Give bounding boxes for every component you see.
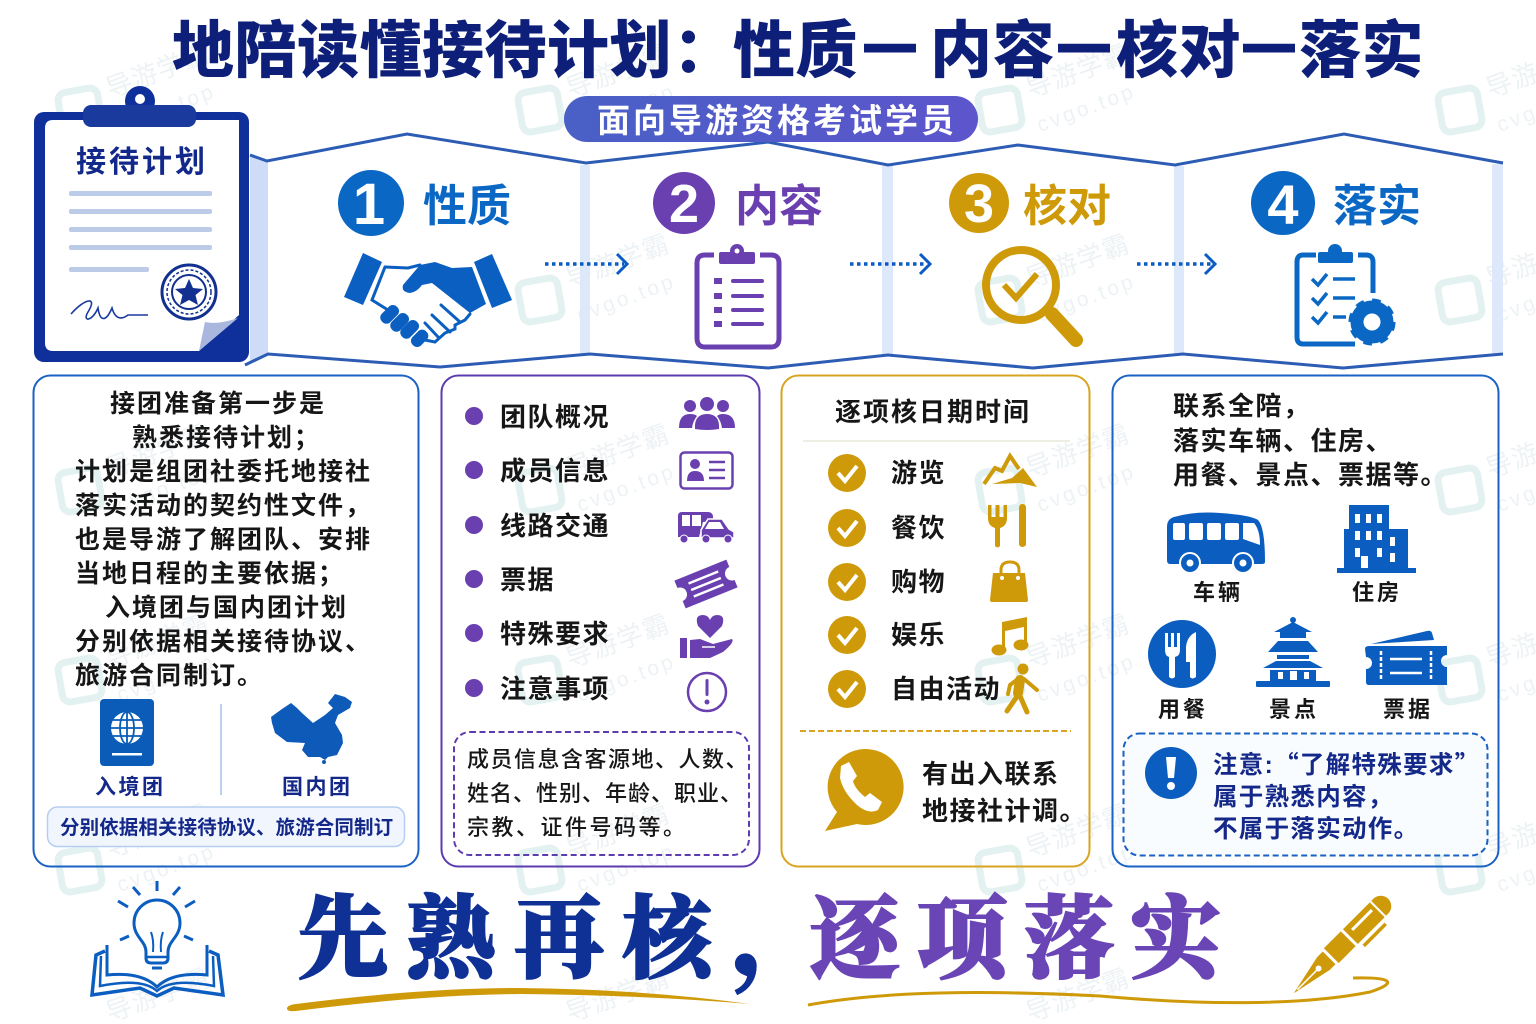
watermark layer: cvgo.top [1034, 80, 1139, 137]
check heading: 逐项核日期时间 [835, 397, 1031, 427]
icon: magnifier [986, 250, 1076, 340]
gold underline right [808, 978, 1388, 1005]
card title: 接待计划 [76, 146, 208, 179]
watermark layer: 导游学霸 [562, 229, 674, 294]
watermark layer: 导游学霸 [562, 609, 674, 674]
slogan: implement item by item: 逐项落实 [810, 891, 1238, 990]
content list [465, 402, 610, 704]
watermark layer: cvgo.top [574, 80, 679, 137]
liaison text [922, 759, 1087, 826]
step 2: content [653, 172, 823, 234]
subtitle pill: 面向导游资格考试学员 [597, 102, 957, 139]
icon: handshake [344, 253, 512, 349]
panel: content [442, 376, 760, 866]
nature body text: 计划是组团社委托地接社 [75, 458, 372, 486]
watermark layer: 导游学霸 [562, 39, 674, 104]
icon: heart in hand [680, 615, 733, 658]
icon: contract clipboard [34, 86, 249, 362]
panel: check [782, 376, 1090, 866]
title: 内容 [930, 17, 1055, 86]
nature body text [75, 390, 372, 690]
icon: checklist with gear [1297, 244, 1392, 344]
icon: notice circle [688, 673, 726, 711]
title: 落实 [1299, 17, 1424, 86]
icon: China map [271, 694, 352, 764]
liaison text: 有出入联系 [922, 759, 1060, 789]
nature body text: 接团准备第一步是 [110, 390, 326, 418]
gold underline left [287, 988, 750, 1011]
check list: 购物 [891, 567, 946, 597]
subtitle pill [564, 96, 978, 142]
label: ticket: 票据 [1383, 697, 1433, 722]
icon: pagoda [1256, 617, 1330, 687]
icon: building [1337, 505, 1416, 573]
nature body text: 当地日程的主要依据； [75, 560, 345, 588]
arrow 1 [545, 254, 627, 274]
icon: tickets [1365, 631, 1447, 685]
watermark layer: cvgo.top [574, 650, 679, 707]
content list: 成员信息 [500, 456, 610, 486]
watermark layer: cvgo.top [1034, 270, 1139, 327]
content list: 票据 [500, 565, 555, 595]
implement text: 用餐、景点、票据等。 [1173, 460, 1448, 490]
nature body text: 也是导游了解团队、安排 [75, 526, 372, 554]
watermark layer: 导游学霸 [562, 799, 674, 864]
content list: 团队概况 [500, 402, 610, 432]
attention note: 注意:“了解特殊要求” [1213, 746, 1480, 781]
watermark layer: cvgo.top [114, 460, 219, 517]
label: domestic group: 国内团 [282, 776, 352, 799]
icon: dining [1148, 620, 1216, 688]
icon: group [679, 397, 735, 430]
content list: 特殊要求 [500, 619, 610, 649]
watermark layer: 导游学霸 [1022, 419, 1134, 484]
watermark layer: cvgo.top [574, 840, 679, 897]
title [172, 17, 1424, 86]
title: — [1245, 19, 1293, 72]
title: 核对 [1116, 17, 1241, 86]
label: dining: 用餐 [1158, 697, 1208, 722]
watermark layer: cvgo.top [114, 270, 219, 327]
nature body text: 旅游合同制订。 [75, 662, 264, 690]
attention note [1124, 734, 1488, 856]
step 3: check: 核对 [1023, 182, 1111, 231]
nature body text: 入境团与国内团计划 [105, 594, 348, 622]
watermark layer: 导游学霸 [102, 609, 214, 674]
watermark layer: cvgo.top [574, 460, 679, 517]
watermark layer: cvgo.top [114, 840, 219, 897]
icon: shopping bag [990, 562, 1028, 602]
step 3: check [949, 173, 1111, 234]
step 4: implement [1251, 171, 1421, 236]
label: scenic: 景点 [1269, 697, 1319, 722]
attention note: 不属于落实动作。 [1213, 815, 1419, 843]
arrow 3 [1137, 254, 1215, 274]
icon: passport [100, 699, 154, 766]
icon: lightbulb and book [92, 881, 223, 996]
step 1: nature [338, 170, 511, 237]
title: 地陪读懂接待计划 [172, 17, 672, 86]
icon: bus [1167, 512, 1265, 573]
title: 性质 [733, 17, 858, 86]
step 2: content: 2 [669, 174, 699, 234]
title: — [866, 19, 914, 72]
label: inbound group: 入境团 [95, 776, 166, 799]
member info note: 宗教、证件号码等。 [467, 815, 688, 840]
nature body text: 熟悉接待计划； [132, 423, 321, 452]
check list: 自由活动 [891, 674, 1001, 704]
icon: phone bubble [825, 749, 904, 831]
nature body text: 落实活动的契约性文件， [75, 492, 372, 520]
watermark layer: 导游学霸 [562, 419, 674, 484]
watermark layer: 导游学霸 [1022, 229, 1134, 294]
check list [828, 454, 1001, 708]
panel: implement [1112, 376, 1498, 866]
check list: 游览 [891, 458, 946, 488]
watermark layer: 导游学霸 [102, 39, 214, 104]
label: vehicle: 车辆 [1193, 580, 1243, 605]
step 3: check: 3 [964, 174, 994, 234]
liaison text: 地接社计调。 [922, 796, 1087, 826]
label: lodging: 住房 [1352, 580, 1402, 605]
member info note [454, 732, 749, 855]
icon: walking person [1007, 664, 1037, 712]
icon: cutlery [988, 504, 1026, 548]
watermark layer: cvgo.top [574, 270, 679, 327]
pill note: 分别依据相关接待协议、旅游合同制订 [60, 816, 393, 839]
icon: music note [992, 617, 1028, 656]
implement text: 联系全陪， [1173, 391, 1311, 421]
content list: 线路交通 [500, 511, 610, 541]
watermark layer: 导游学霸 [102, 799, 214, 864]
watermark layer: cvgo.top [1034, 650, 1139, 707]
folded banner [245, 134, 1503, 368]
step 1: nature: 1 [353, 172, 385, 237]
attention note: 属于熟悉内容， [1213, 782, 1394, 811]
icon: fountain pen [1286, 891, 1400, 1005]
panel: nature [34, 376, 418, 866]
watermark layer: 导游学霸 [102, 229, 214, 294]
pill note [48, 807, 404, 846]
watermark layer: cvgo.top [1034, 840, 1139, 897]
watermark layer: 导游学霸 [102, 419, 214, 484]
nature body text: 分别依据相关接待协议、 [75, 628, 372, 656]
step 4: implement: 4 [1267, 173, 1299, 236]
member info note: 成员信息含客源地、人数、 [467, 747, 749, 772]
title: — [1060, 19, 1108, 72]
watermark layer: cvgo.top [1034, 460, 1139, 517]
watermark layer: 导游学霸 [1022, 39, 1134, 104]
member info note: 姓名、性别、年龄、职业、 [467, 781, 743, 806]
check list: 娱乐 [891, 620, 946, 650]
step 1: nature: 性质 [423, 182, 511, 231]
step 2: content: 内容 [735, 182, 823, 231]
watermark layer: cvgo.top [114, 80, 219, 137]
watermark layer: 导游学霸 [1022, 799, 1134, 864]
icon: ticket [674, 560, 738, 608]
implement text: 落实车辆、住房、 [1173, 426, 1393, 456]
slogan: familiarize then check: 先熟再核， [298, 881, 850, 995]
arrow 2 [850, 254, 930, 274]
check list: 餐饮 [891, 513, 946, 543]
step 4: implement: 落实 [1333, 182, 1421, 231]
content list: 注意事项 [500, 674, 610, 704]
title: ： [673, 17, 736, 86]
watermark layer: cvgo.top [114, 650, 219, 707]
watermark layer: 导游学霸 [1022, 609, 1134, 674]
implement text [1173, 391, 1448, 490]
icon: id card [680, 452, 732, 488]
icon: purple clipboard [697, 244, 779, 347]
icon: vehicles [678, 512, 734, 543]
icon: mountain [984, 456, 1037, 487]
